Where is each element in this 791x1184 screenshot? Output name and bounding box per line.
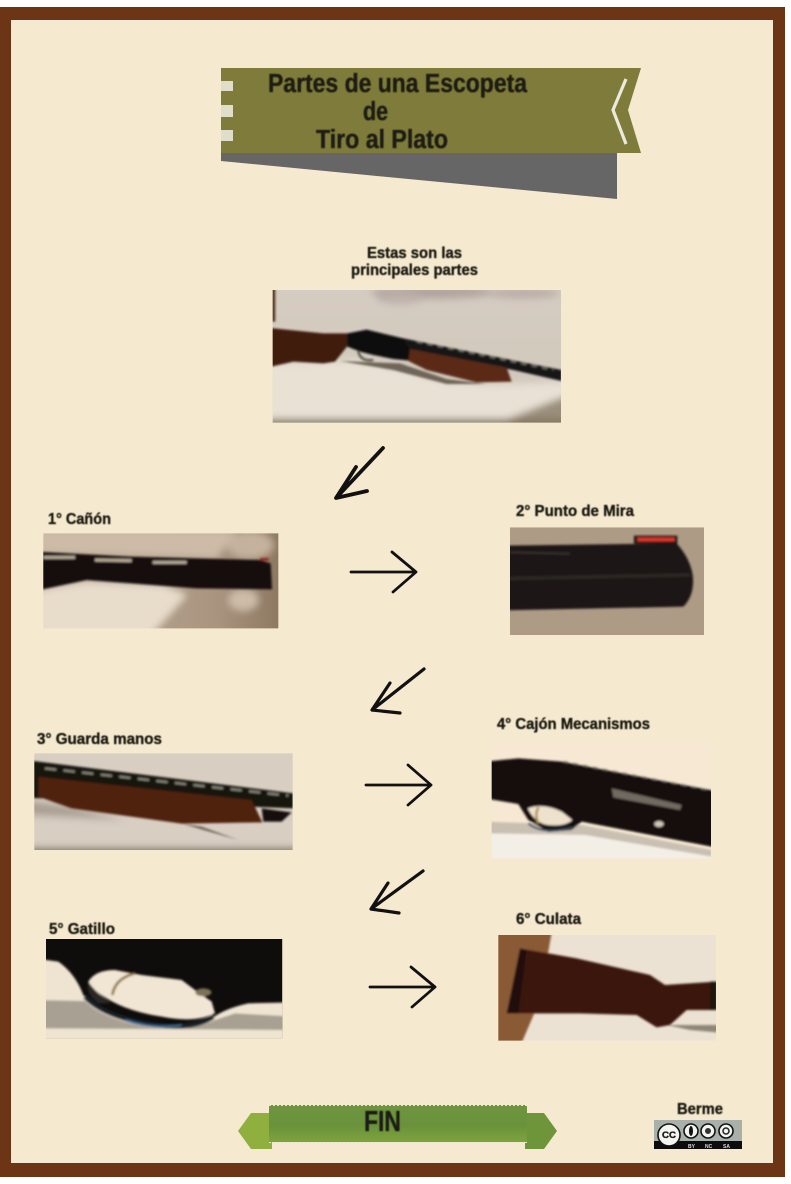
author name: Berme [677, 1101, 723, 1118]
photo: trigger [46, 939, 282, 1038]
end ribbon [238, 1105, 557, 1149]
photo: forend [34, 754, 293, 850]
licence badge: SA [723, 1144, 730, 1150]
label: step 3: 3° Guarda manos [37, 731, 162, 748]
photo: receiver [492, 756, 711, 858]
label: step 6: 6° Culata [516, 911, 581, 928]
intro text: principales partes [351, 262, 478, 279]
arrow: step 4 to step 5 [371, 871, 423, 913]
licence badge: BY [688, 1144, 696, 1150]
title banner [221, 68, 641, 199]
title text: Tiro al Plato [316, 126, 448, 154]
ribbon squares [221, 81, 233, 141]
arrow: photo to step 1 [336, 448, 383, 498]
end text: FIN [364, 1106, 401, 1138]
arrow: step 1 to step 2 [351, 552, 416, 592]
intro text [351, 245, 478, 279]
title text: Partes de una Escopeta [268, 70, 528, 98]
label: step 4: 4° Cajón Mecanismos [497, 716, 650, 733]
intro text: Estas son las [367, 245, 462, 262]
ribbon right tail [525, 1113, 557, 1149]
ribbon left tail [238, 1113, 272, 1149]
licence badge: NC [705, 1144, 713, 1150]
banner shadow [221, 153, 617, 199]
photo: stock [498, 935, 716, 1041]
title text [268, 70, 528, 154]
photo: barrel [43, 533, 278, 628]
licence badge [654, 1120, 742, 1150]
arrow: step 2 to step 3 [372, 669, 424, 713]
licence badge: CC [662, 1130, 677, 1140]
label: step 5: 5° Gatillo [49, 921, 115, 938]
title text: de [363, 98, 388, 126]
label: step 1: 1° Cañón [48, 511, 111, 528]
photo: full shotgun [272, 290, 561, 423]
arrow: step 5 to step 6 [370, 967, 435, 1007]
photo: front sight [500, 527, 704, 635]
ribbon chevron [613, 79, 626, 144]
ribbon centre [269, 1105, 527, 1142]
label: step 2: 2° Punto de Mira [516, 503, 634, 520]
arrow: step 3 to step 4 [366, 765, 431, 805]
olive ribbon [221, 68, 641, 153]
